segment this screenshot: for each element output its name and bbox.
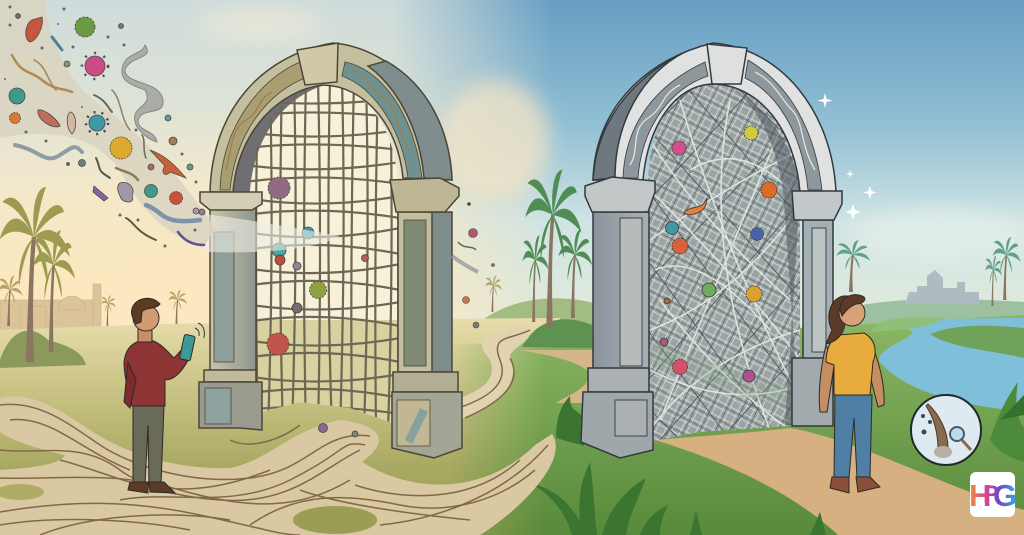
palm tall left — [0, 187, 75, 362]
germs leaking right of left gate — [452, 202, 494, 328]
left gate: arch — [210, 43, 452, 192]
palms far right — [836, 237, 1021, 306]
distant town left — [0, 284, 101, 340]
ground left — [0, 318, 560, 535]
grass clump right edge — [990, 382, 1024, 462]
sparkles — [818, 93, 876, 220]
logo badge — [969, 472, 1017, 517]
dust trail — [0, 0, 215, 245]
mist across left pillar — [175, 212, 340, 252]
sky — [0, 0, 1024, 360]
logo badge: P — [983, 481, 999, 508]
left gate: net — [233, 80, 400, 430]
hills behind right scene — [480, 270, 1024, 350]
bush right — [522, 319, 592, 348]
small winding path — [518, 350, 599, 403]
inset: hair follicle magnifier — [911, 395, 981, 465]
left gate: germs in net — [267, 177, 368, 437]
logo badge: G — [993, 478, 1017, 513]
sandy stream left — [0, 326, 556, 535]
ground right — [440, 315, 1024, 535]
woman looking up — [819, 295, 884, 493]
right gate: wall — [648, 84, 800, 441]
foreground grass — [528, 396, 826, 535]
logo badge: H — [969, 478, 991, 513]
distant palms left — [0, 276, 502, 326]
dirt path right — [655, 428, 1024, 535]
germ cloud — [0, 0, 215, 248]
left gate: left pillar — [199, 192, 262, 430]
right gate: right pillar — [792, 191, 842, 426]
right gate: arch — [593, 43, 836, 192]
right gate: trapped germs — [660, 126, 777, 382]
bush left — [0, 330, 86, 368]
palms middle right — [522, 170, 592, 328]
smoke wisp — [122, 45, 163, 142]
right gate: left pillar — [581, 177, 655, 458]
man with phone — [124, 298, 204, 493]
left gate: right pillar — [390, 178, 462, 458]
river — [870, 317, 1024, 412]
